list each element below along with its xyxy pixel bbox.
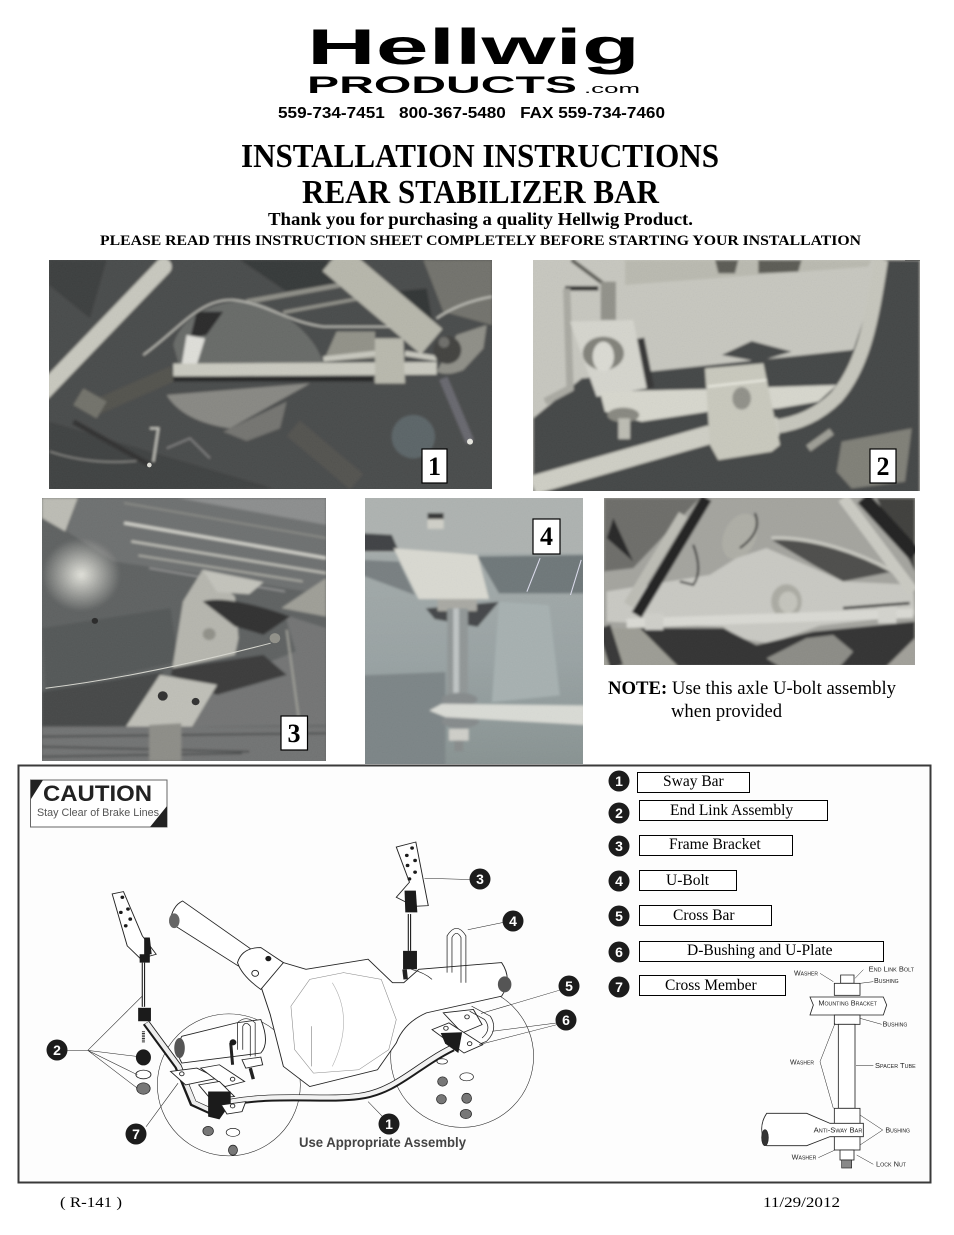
legend item 7: 7 [615, 979, 623, 995]
number tag 3: 3 [288, 719, 300, 748]
diagram callout numbers: 1 [385, 1116, 393, 1132]
legend item 4 [608, 870, 736, 892]
zoom circles [157, 985, 534, 1156]
number tag 3 [281, 716, 308, 750]
caution notice: CAUTION [43, 781, 152, 806]
axle housing [169, 901, 511, 1087]
legend item 3: Frame Bracket [669, 836, 761, 853]
read instructions warning: PLEASE READ THIS INSTRUCTION SHEET COMPLETELY BEFORE STARTING YOUR INSTALLATION [100, 233, 861, 249]
legend item 3: 3 [615, 838, 623, 854]
thank you line: Thank you for purchasing a quality Hellwig Product. [268, 209, 693, 229]
end link cross-section drawing: Bushing [874, 978, 899, 985]
sway bar [146, 1023, 453, 1113]
U-bolt [447, 928, 466, 983]
end link cross-section drawing: Washer [792, 1155, 817, 1162]
diagram callout numbers: 5 [565, 978, 573, 994]
legend item 5 [608, 906, 772, 926]
axle tube detail [174, 1019, 266, 1079]
photo 4: spacer tube end link [356, 488, 592, 772]
end link cross-section drawing: Bushing [883, 1021, 907, 1028]
leader lines [63, 878, 560, 1127]
diagram callout numbers: 4 [509, 913, 517, 929]
loose hardware [203, 1059, 473, 1155]
photo 3: frame bracket [28, 488, 335, 768]
number tag 1 [422, 449, 447, 483]
number tag 4 [533, 519, 560, 554]
exploded axle and sway bar drawing [63, 842, 560, 1156]
footer date: 11/29/2012 [763, 1195, 840, 1211]
legend item 6 [608, 942, 884, 962]
frame brackets and end links [112, 842, 432, 1094]
diagram callout numbers: 3 [476, 871, 484, 887]
end link cross-section drawing: Lock Nut [876, 1161, 906, 1168]
diagram callout numbers: 2 [53, 1042, 61, 1058]
title [241, 138, 719, 211]
caution notice [30, 780, 167, 827]
footer part number: ( R-141 ) [60, 1195, 122, 1211]
legend item 2: 2 [615, 805, 623, 821]
title: REAR STABILIZER BAR [302, 174, 660, 211]
legend item 5: Cross Bar [673, 907, 735, 924]
logo: Hellwig Products.com: PRODUCTS [307, 72, 577, 99]
legend item 1 [608, 770, 750, 792]
caption: use appropriate assembly: Use Appropriate Assembly [299, 1134, 466, 1150]
note about axle U-bolt [608, 679, 897, 722]
legend item 6: 6 [615, 944, 623, 960]
legend item 1: Sway Bar [663, 773, 725, 790]
legend item 4: U-Bolt [666, 872, 710, 889]
logo: Hellwig Products.com: Hellwig [307, 19, 640, 75]
legend item 3 [608, 836, 792, 856]
logo: Hellwig Products.com: .com [584, 81, 640, 96]
phone and fax numbers: 559-734-7451 800-367-5480 FAX 559-734-7460 [278, 105, 665, 122]
note about axle U-bolt: NOTE: Use this axle U-bolt assembly [608, 679, 897, 699]
brackets and bushings [171, 1006, 494, 1119]
note about axle U-bolt: when provided [671, 702, 783, 722]
photo 5: axle with U-bolt assembly [593, 488, 926, 675]
legend item 5: 5 [615, 908, 623, 924]
end link cross-section drawing: End Link Bolt [869, 967, 914, 974]
legend item 2: End Link Assembly [670, 802, 793, 819]
photo 1: sway bar under the axle [33, 248, 517, 502]
diagram callout numbers [46, 868, 580, 1144]
caution notice: Stay Clear of Brake Lines [37, 807, 159, 819]
number tag 2 [870, 449, 896, 483]
legend item 2 [608, 800, 828, 824]
legend item 6: D-Bushing and U-Plate [687, 942, 833, 959]
end link cross-section drawing: Anti-Sway Bar [814, 1127, 863, 1134]
number tag 1: 1 [428, 452, 441, 481]
legend item 1: 1 [615, 773, 623, 789]
photo 2: end link and clamp closeup [518, 248, 935, 502]
end link cross-section drawing: Washer [790, 1059, 814, 1066]
parts legend [608, 770, 884, 998]
diagram callout numbers: 7 [132, 1126, 140, 1142]
panel: parts diagram frame [18, 766, 930, 1182]
end link cross-section drawing [762, 967, 916, 1168]
end link cross-section drawing: Mounting Bracket [818, 1001, 877, 1008]
number tag 2: 2 [876, 452, 890, 481]
legend item 7 [608, 976, 786, 998]
legend item 7: Cross Member [665, 977, 758, 994]
end link cross-section drawing: Bushing [885, 1127, 910, 1134]
logo: Hellwig Products.com [307, 19, 640, 99]
number tag 4: 4 [540, 522, 553, 551]
end link cross-section drawing: Spacer Tube [875, 1063, 916, 1070]
diagram callout numbers: 6 [562, 1012, 570, 1028]
title: INSTALLATION INSTRUCTIONS [241, 138, 719, 175]
legend item 4: 4 [615, 873, 623, 889]
end link cross-section drawing: Washer [794, 971, 818, 978]
